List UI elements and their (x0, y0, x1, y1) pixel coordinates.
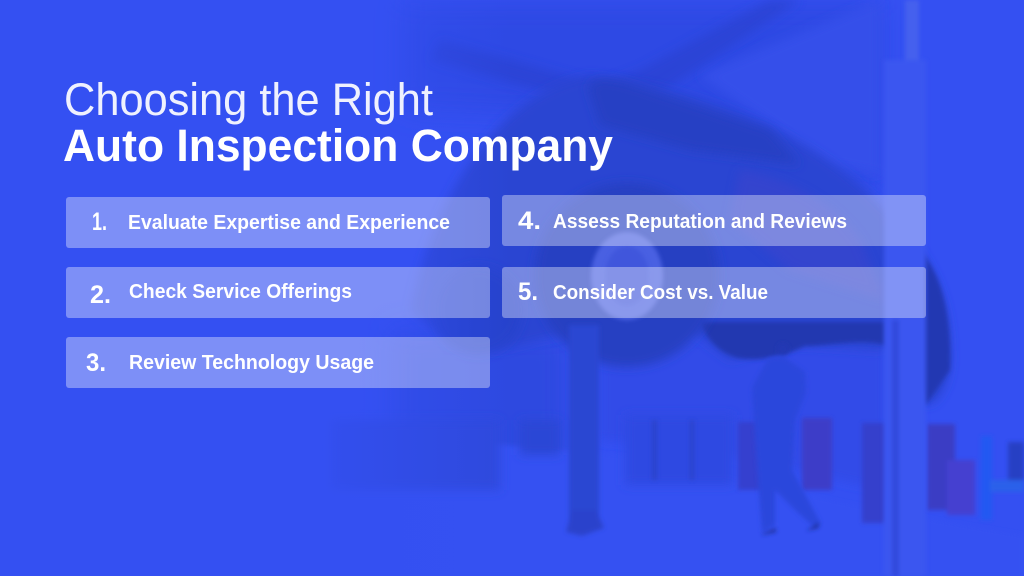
floor (300, 430, 1024, 576)
item 5: Consider Cost vs. Value (553, 282, 768, 304)
item 4: Assess Reputation and Reviews (553, 211, 847, 233)
ceiling and wall tones (390, 0, 886, 490)
cabinets in the background (330, 415, 733, 490)
item 3: 3. (86, 349, 106, 377)
item 1: 1. (92, 208, 107, 236)
item 3: Review Technology Usage (129, 352, 374, 374)
item 3 (66, 337, 490, 388)
mechanic figure (752, 343, 820, 535)
item 2: Check Service Offerings (129, 281, 352, 303)
car wheel (434, 183, 719, 367)
item 4 (502, 195, 926, 246)
lift pillar right (884, 0, 926, 576)
item 2 (66, 267, 490, 318)
item 2: 2. (90, 281, 111, 309)
title (63, 74, 613, 171)
lift post left (566, 325, 604, 536)
item 5 (502, 267, 926, 318)
item 1: Evaluate Expertise and Experience (128, 212, 450, 234)
title line 2: Auto Inspection Company (63, 120, 613, 171)
title line 1: Choosing the Right (64, 74, 433, 125)
item 5: 5. (518, 278, 538, 306)
item 4: 4. (518, 207, 541, 235)
car on the lift (410, 76, 950, 406)
item 1 (66, 197, 490, 248)
